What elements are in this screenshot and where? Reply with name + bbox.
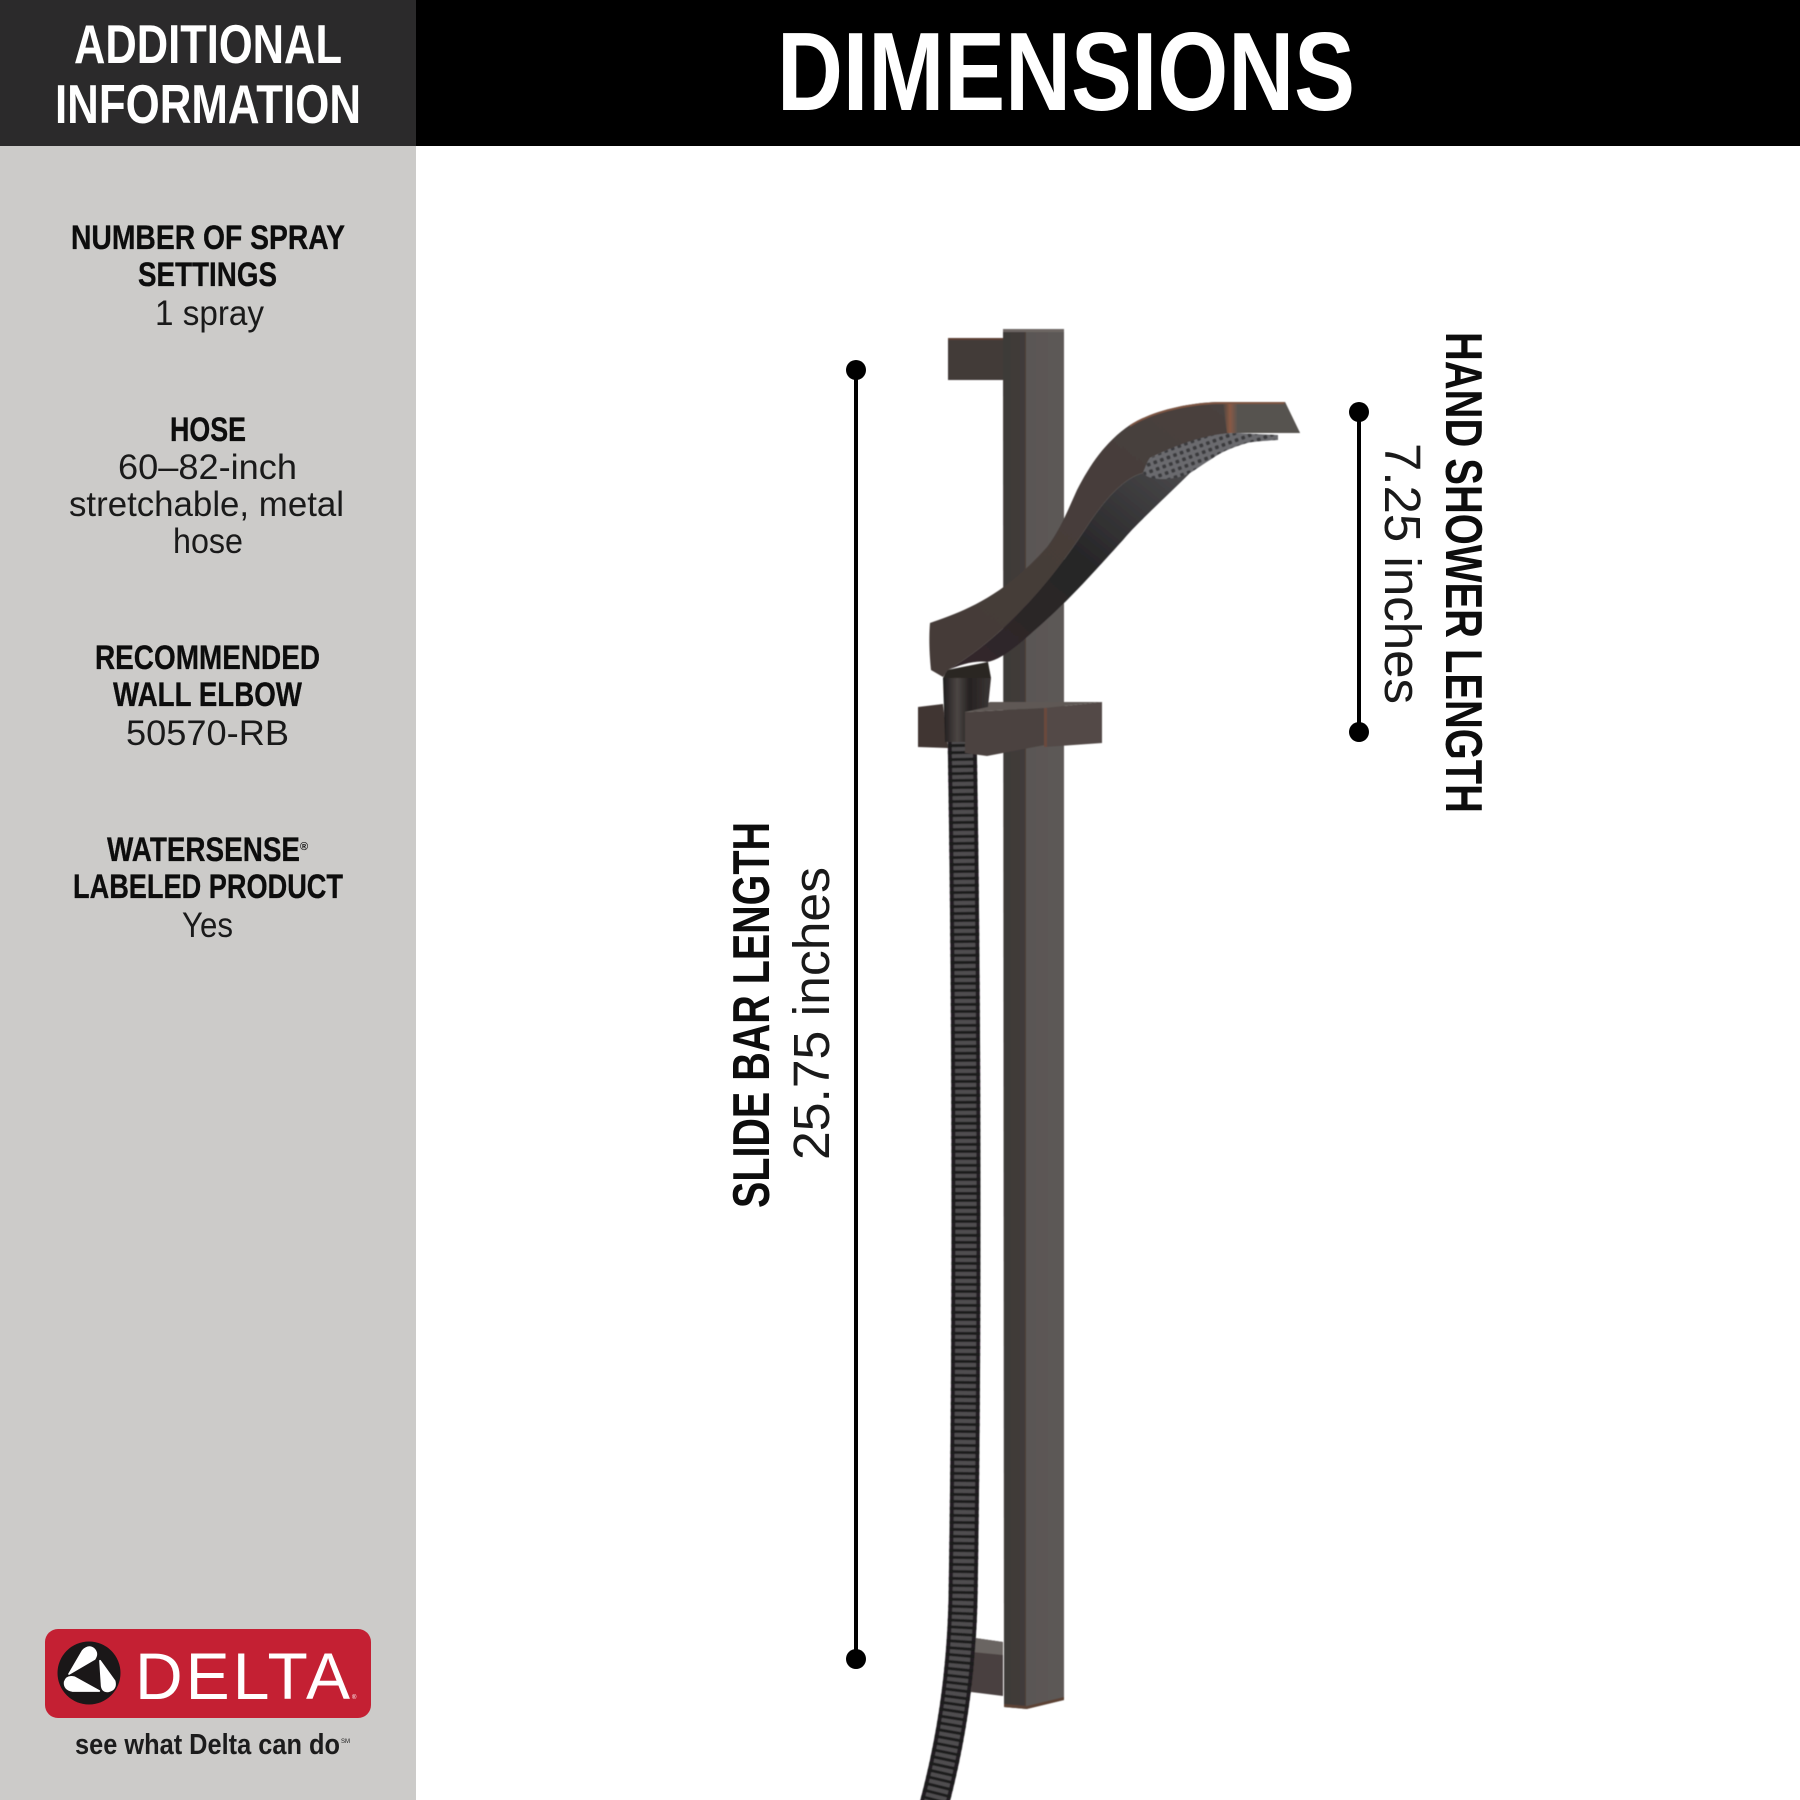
dimension line: hand shower: [1349, 402, 1369, 742]
header: additional information: ADDITIONAL: [74, 13, 342, 75]
hose holder bracket: [918, 702, 1102, 756]
label: hand shower length: HAND SHOWER LENGTH: [1434, 332, 1492, 813]
spec: recommended wall elbow: RECOMMENDED: [95, 639, 320, 677]
label: hand shower length: 7.25 inches: [1374, 443, 1431, 704]
sidebar background: [0, 146, 416, 1800]
spec: recommended wall elbow: 50570-RB: [126, 714, 289, 753]
header: additional information: [0, 0, 416, 146]
hose: [934, 730, 966, 1800]
delta logo: DELTA: [135, 1639, 350, 1713]
icon: delta triangle mark: [58, 1642, 120, 1704]
spec: number of spray settings: SETTINGS: [138, 256, 277, 294]
spec: watersense labeled product: [73, 831, 343, 945]
handle tip: [1237, 402, 1300, 433]
spec: watersense labeled product: WATERSENSE: [107, 831, 300, 869]
header: dimensions title: [416, 0, 1800, 146]
spray face: [1143, 433, 1278, 479]
spec: recommended wall elbow: [95, 639, 320, 753]
spec: recommended wall elbow: WALL ELBOW: [113, 676, 303, 714]
label: hand shower length: [1374, 332, 1492, 813]
swivel elbow: [943, 662, 991, 742]
header: additional information: INFORMATION: [55, 73, 361, 135]
spec: hose: [69, 411, 344, 561]
top wall bracket: [948, 338, 1004, 380]
spec: hose: 60–82-inch: [118, 448, 297, 487]
dimension line: slide bar: [846, 360, 866, 1669]
handle underside: [948, 473, 1190, 670]
tagline: SM: [341, 1739, 350, 1745]
spec: hose: hose: [173, 522, 243, 561]
delta logo: ®: [352, 1694, 357, 1701]
spec: hose: stretchable, metal: [69, 485, 344, 524]
label: slide bar length: 25.75 inches: [783, 867, 840, 1160]
label: slide bar length: SLIDE BAR LENGTH: [723, 822, 781, 1208]
spec: number of spray settings: [71, 219, 345, 333]
spec: number of spray settings: NUMBER OF SPRAY: [71, 219, 345, 257]
spec: watersense labeled product: Yes: [182, 906, 233, 945]
label: slide bar length: [723, 822, 840, 1208]
spec: hose: HOSE: [170, 411, 246, 449]
hand shower handle: [929, 402, 1300, 677]
bottom wall bracket: [971, 1638, 1003, 1696]
spec: number of spray settings: 1 spray: [155, 294, 264, 333]
slide bar: [1003, 329, 1064, 1709]
spec: watersense labeled product: ®: [300, 841, 308, 853]
spec: watersense labeled product: LABELED PRODUCT: [73, 868, 343, 906]
product: slide bar and hand shower: [918, 329, 1300, 1800]
delta logo: [45, 1629, 371, 1718]
tagline: see what Delta can do: [75, 1729, 340, 1761]
header: dimensions title: DIMENSIONS: [777, 10, 1355, 134]
